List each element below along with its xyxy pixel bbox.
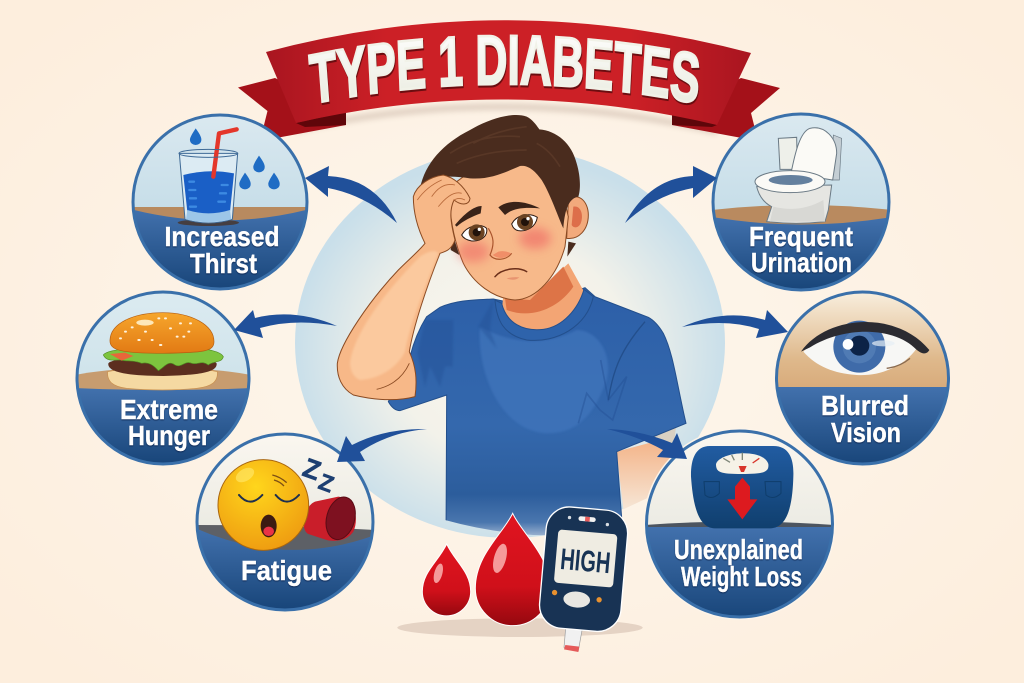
label line 2: Thirst <box>190 248 257 279</box>
t-shirt <box>388 288 686 540</box>
eyebrows <box>455 206 482 227</box>
label: Fatigue <box>241 555 332 586</box>
neck shadow <box>505 267 573 313</box>
banner tails <box>238 78 780 141</box>
label line 2: Urination <box>751 247 852 278</box>
arrow: to increased thirst <box>305 166 397 223</box>
label: Blurred <box>821 390 909 421</box>
table <box>134 207 306 220</box>
label: Extreme <box>120 394 218 425</box>
bandage <box>638 422 677 443</box>
label band <box>648 527 831 616</box>
label band <box>198 530 370 608</box>
arrow: to fatigue <box>337 429 427 462</box>
label: Frequent <box>749 221 853 252</box>
blood drops and glucose meter <box>397 505 643 652</box>
table <box>78 370 248 390</box>
label band <box>75 388 251 466</box>
shirt highlight <box>480 327 608 433</box>
panel: frequent urination <box>712 112 892 292</box>
icon: bathroom scale <box>691 446 793 528</box>
fingers <box>417 180 465 207</box>
icon: glass of water with straw <box>178 128 280 226</box>
right eye <box>512 214 537 231</box>
banner folds <box>296 112 717 127</box>
icon: burger <box>103 313 223 390</box>
mouth <box>495 269 527 277</box>
arrow: to blurred vision <box>682 310 788 338</box>
meter reading: HIGH <box>559 543 612 580</box>
label band <box>716 218 886 288</box>
large blood drop <box>475 513 550 626</box>
label: Unexplained <box>674 534 803 565</box>
hair strands <box>450 127 560 167</box>
red muscle <box>304 497 356 541</box>
label line 2: Hunger <box>128 420 210 451</box>
central pale blue circle <box>295 148 725 538</box>
label line 2: Weight Loss <box>681 561 802 592</box>
panel: unexplained weight loss <box>644 428 836 622</box>
shirt folds <box>419 310 494 382</box>
icon: toilet <box>755 128 842 223</box>
icon: sleepy emoji with muscle <box>218 460 360 550</box>
person holding head <box>337 115 686 540</box>
icon: eye <box>801 321 929 375</box>
ring <box>77 292 249 464</box>
left eye <box>462 224 487 241</box>
ring <box>776 292 948 464</box>
face <box>450 163 568 300</box>
ring <box>713 114 889 290</box>
banner ribbon <box>266 20 751 125</box>
hair <box>420 115 580 228</box>
title banner <box>238 20 780 138</box>
panel: fatigue <box>195 432 375 612</box>
table <box>198 525 372 550</box>
ground shadow <box>397 618 643 637</box>
label: Increased <box>164 221 280 252</box>
title: TYPE 1 DIABETES <box>308 34 700 106</box>
panel: increased thirst <box>130 112 310 292</box>
raised arm and hand <box>337 175 470 400</box>
ring <box>646 431 832 617</box>
meter button <box>563 590 591 609</box>
icon: sleep letters 2: Z <box>315 468 337 498</box>
arrow: to weight loss <box>607 429 687 459</box>
elbow crease <box>377 363 409 389</box>
panel: extreme hunger <box>75 290 251 466</box>
glucose meter <box>538 505 630 633</box>
arm highlight <box>350 251 438 380</box>
ring <box>197 434 373 610</box>
small blood drop <box>422 544 471 616</box>
table <box>714 206 888 224</box>
neck <box>502 263 584 332</box>
nose <box>488 228 512 259</box>
meter screen <box>554 529 618 588</box>
ring <box>133 115 307 289</box>
label line 2: Vision <box>831 417 901 448</box>
collar <box>495 289 593 340</box>
table <box>648 522 831 527</box>
water drops <box>190 128 201 145</box>
ear <box>567 197 588 239</box>
hair below hand <box>451 240 459 255</box>
cheeks <box>457 241 489 262</box>
arrow: to extreme hunger <box>234 310 337 338</box>
icon: sleep letters: Z <box>299 452 325 486</box>
test strip <box>564 617 584 651</box>
banner shadow <box>296 103 717 135</box>
panel: blurred vision <box>775 290 951 467</box>
label band <box>134 210 306 288</box>
lower arm below sleeve <box>617 437 678 509</box>
arrow: to frequent urination <box>625 166 717 223</box>
label band <box>775 387 951 467</box>
